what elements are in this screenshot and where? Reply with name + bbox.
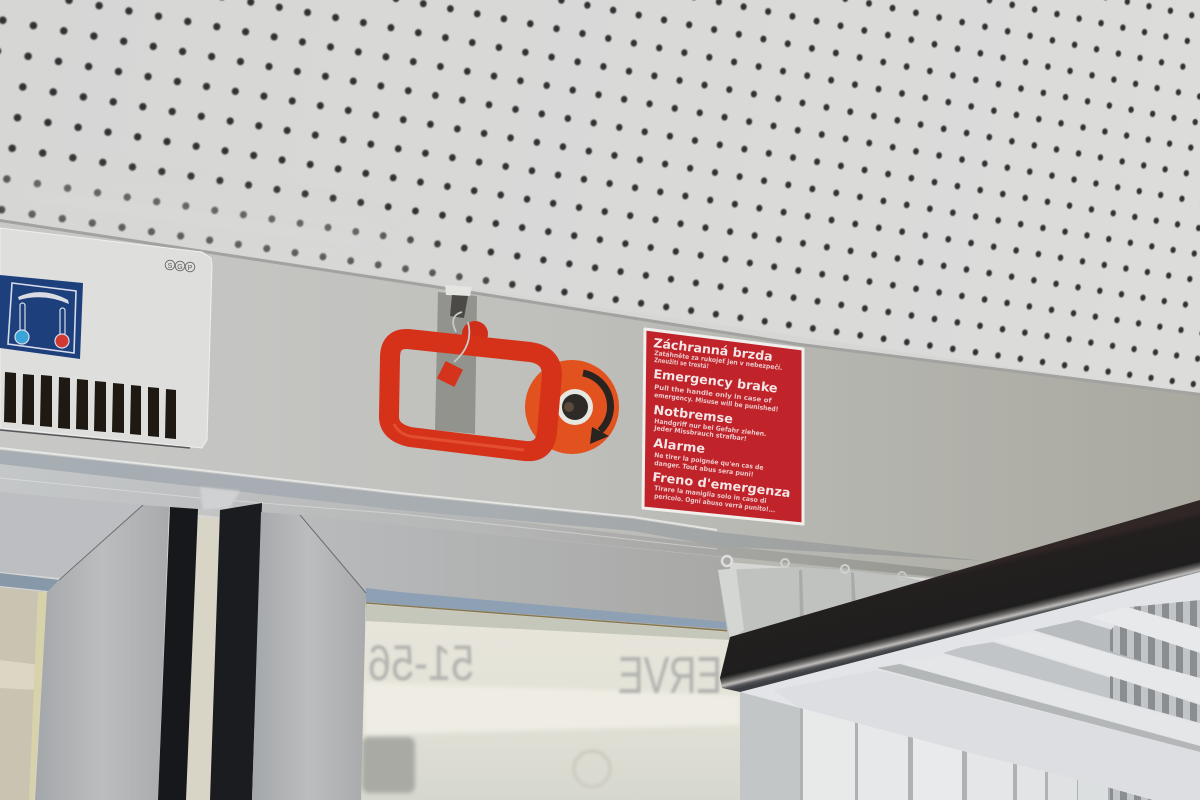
maker mark SGP bbox=[165, 260, 195, 272]
red pull ring bbox=[389, 321, 552, 451]
mounting bracket bbox=[435, 292, 477, 434]
Italian notice bbox=[652, 469, 791, 514]
dot fade near ceiling edge bbox=[0, 160, 520, 290]
right door upper panel bbox=[300, 515, 730, 640]
German notice: Notbremse bbox=[653, 402, 734, 426]
air vent panel bbox=[0, 228, 212, 448]
upper curtain and hooks bbox=[718, 556, 960, 650]
English notice: Emergency brake bbox=[653, 366, 779, 396]
English notice bbox=[653, 366, 779, 414]
bracket slot bbox=[450, 295, 468, 318]
seal wire bbox=[453, 312, 469, 362]
dark handrail bbox=[720, 500, 1200, 692]
left window glass bbox=[0, 587, 47, 800]
ribbed lower section bbox=[0, 463, 967, 580]
orange release disc bbox=[525, 360, 619, 454]
light gap between doors bbox=[186, 518, 219, 800]
vent opening front bbox=[943, 642, 1200, 723]
icon: rotation arrow bbox=[583, 373, 611, 444]
vent slots bbox=[4, 372, 176, 439]
black door seal right bbox=[210, 503, 262, 800]
left door post bbox=[35, 505, 169, 800]
reflective edge strip bbox=[877, 664, 1200, 752]
reflected square sign bbox=[362, 737, 415, 793]
Czech notice: Zneužití se trestá! bbox=[654, 356, 709, 370]
Italian notice: pericolo. Ogni abuso verrà punito!... bbox=[654, 492, 776, 514]
reflected round sign bbox=[574, 751, 610, 787]
reflected carriage number: 51-56 bbox=[368, 635, 474, 691]
release socket bbox=[557, 389, 593, 425]
maker mark SGP: S bbox=[168, 263, 173, 270]
French notice: Alarme bbox=[653, 435, 706, 456]
reflected word: ERVE bbox=[618, 647, 722, 705]
curved blue-grey band bbox=[0, 450, 985, 561]
maker mark SGP: P bbox=[188, 265, 193, 272]
English notice: emergency. Misuse will be punished! bbox=[654, 391, 779, 414]
vent strut top bbox=[1090, 607, 1200, 653]
right door post bbox=[252, 512, 366, 800]
black door seal left bbox=[158, 507, 198, 800]
English notice: Pull the handle only in case of bbox=[654, 383, 772, 405]
left door upper panel bbox=[0, 492, 143, 591]
bracket lug bbox=[445, 285, 472, 296]
ceiling vent behind handrail bbox=[740, 572, 1200, 800]
vent strut lower bbox=[900, 655, 1200, 745]
wide vent band bbox=[773, 670, 1200, 800]
vent strut middle bbox=[993, 632, 1200, 703]
Czech notice: Zatáhněte za rukojeť jen v nebezpečí. bbox=[654, 348, 783, 372]
French notice bbox=[653, 435, 764, 479]
French notice: Ne tirer la poignée qu'en cas de bbox=[654, 451, 764, 472]
Italian notice: Freno d'emergenza bbox=[652, 469, 791, 500]
right window with reflection bbox=[361, 603, 740, 800]
German notice: Handgriff nur bei Gefahr ziehen. bbox=[654, 417, 767, 438]
vent opening rear bbox=[1033, 620, 1200, 680]
perforated ceiling panel bbox=[0, 0, 1200, 420]
German notice: Jeder Missbrauch strafbar! bbox=[653, 424, 747, 443]
Italian notice: Tirare la maniglia solo in caso di bbox=[654, 484, 767, 505]
icon: temperature control bbox=[0, 275, 83, 359]
German notice bbox=[653, 402, 767, 443]
French notice: danger. Tout abus sera puni! bbox=[654, 459, 754, 479]
emergency brake handle assembly bbox=[389, 285, 619, 454]
red padlock seal bbox=[438, 362, 462, 386]
Czech notice: Záchranná brzda bbox=[653, 335, 774, 364]
lower curtain slats bbox=[740, 680, 1200, 800]
maker mark SGP: G bbox=[177, 264, 183, 271]
emergency brake sign bbox=[643, 329, 803, 524]
overhead beam bbox=[0, 219, 1200, 580]
metal door cap bbox=[200, 487, 240, 510]
